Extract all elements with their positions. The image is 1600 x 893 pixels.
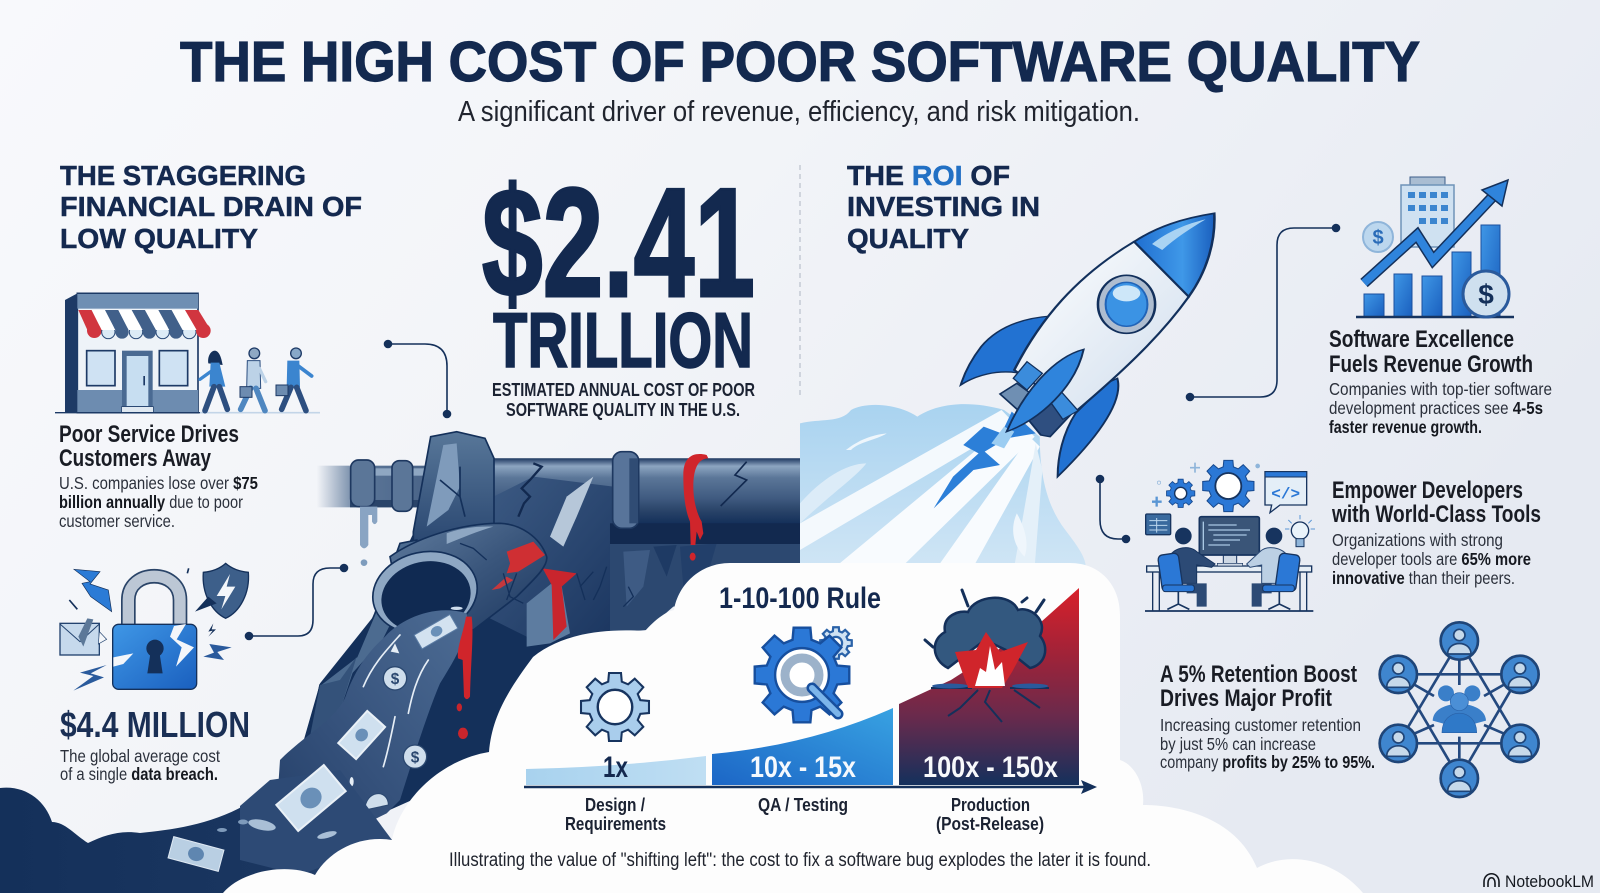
icon: storefront with customers walking away: [55, 293, 320, 413]
coin: [383, 667, 407, 690]
text block: revenue growth: development practices see 4-5s: [1329, 398, 1543, 418]
connector: rocket to revenue: [1186, 224, 1340, 400]
rock backing mass: [267, 458, 800, 850]
text block: retention: Drives Major Profit: [1160, 685, 1332, 712]
icon: production explosion: [925, 590, 1049, 722]
rocket nose: [1134, 213, 1214, 297]
thin pipe on left: [317, 466, 427, 507]
heading: ROI: THE ROI OF: [847, 160, 1010, 191]
panel: white cloud: [223, 563, 1363, 893]
red rust crack: [543, 568, 577, 640]
red leak from mouth: [458, 617, 472, 699]
stage labels: QA / Testing: [758, 795, 848, 815]
multiplier labels: 1x: [603, 751, 628, 784]
stage labels: Design /: [585, 795, 645, 815]
caption: Illustrating the value of "shifting left": the cost to fix a software bug explodes the later it is found.: [449, 850, 1151, 871]
stage labels: [565, 795, 1044, 834]
text block: data breach: The global average cost: [60, 746, 220, 766]
coin: $: [391, 671, 400, 688]
coin small: [1363, 222, 1393, 252]
icon: developers at desk: [1145, 460, 1315, 611]
connector: padlock to pipe: [246, 564, 348, 640]
text block: poor service: [59, 421, 258, 531]
chart: cost escalation curve: [524, 588, 1097, 794]
connector: rocket to developers: [1096, 476, 1130, 542]
stage labels: (Post-Release): [936, 814, 1044, 834]
text block: poor service: customer service.: [59, 511, 175, 531]
small gear: [1167, 479, 1195, 507]
code panel: [1146, 514, 1171, 535]
rocket flame: [934, 412, 1036, 508]
headline statistic: 2.41 trillion: [482, 156, 755, 420]
multiplier labels: 100x - 150x: [923, 751, 1058, 784]
nodes: [1380, 622, 1539, 797]
text block: poor service: Customers Away: [59, 445, 212, 472]
text block: revenue growth: Fuels Revenue Growth: [1329, 351, 1533, 378]
illustration: rocket: [934, 213, 1214, 508]
headline statistic: 2.41 trillion: $2.41: [482, 156, 755, 329]
heading: financial drain: LOW QUALITY: [60, 223, 258, 254]
text block: retention: [1160, 661, 1375, 772]
banknote: [338, 711, 385, 759]
coin: $: [411, 749, 420, 766]
illustration: exhaust cloud behind rocket: [800, 404, 1086, 567]
growth arrow: [1364, 180, 1508, 283]
text block: developer tools: Empower Developers: [1332, 477, 1523, 504]
money stream: [273, 610, 467, 860]
title: THE HIGH COST OF POOR SOFTWARE QUALITY: [180, 30, 1420, 94]
coin: [403, 745, 427, 768]
text block: retention: company profits by 25% to 95%.: [1160, 752, 1375, 772]
banknote in pool: [168, 837, 224, 871]
red patch on broken pipe: [507, 542, 545, 573]
stream highlights: [363, 635, 428, 767]
icon: broken padlock with lightning: [60, 563, 249, 691]
connector: storefront to pipe: [384, 340, 450, 418]
text block: poor service: billion annually due to poor: [59, 492, 243, 512]
broken pipe section: [390, 523, 547, 630]
text block: revenue growth: faster revenue growth.: [1329, 417, 1482, 437]
text block: revenue growth: Software Excellence: [1329, 326, 1514, 353]
code window: </>: [1271, 486, 1300, 504]
centre group: [1433, 685, 1486, 733]
coin small: $: [1372, 227, 1384, 249]
banknote: [414, 614, 458, 649]
stage labels: Production: [951, 795, 1030, 815]
text block: revenue growth: Companies with top-tier software: [1329, 379, 1552, 399]
icon: QA gear with wrench: [755, 627, 852, 722]
pipe collars: [613, 452, 639, 528]
icon: customer network: [1380, 622, 1539, 797]
text block: retention: Increasing customer retention: [1160, 715, 1361, 735]
heading: financial drain: THE STAGGERING: [60, 160, 306, 191]
heading: ROI: INVESTING IN: [847, 191, 1040, 222]
heading: ROI: QUALITY: [847, 223, 969, 254]
text block: developer tools: Organizations with strong: [1332, 530, 1503, 550]
coin large: $: [1478, 279, 1494, 310]
banknote in pool: [276, 765, 346, 831]
headline statistic: 2.41 trillion: ESTIMATED ANNUAL COST OF POOR: [492, 380, 755, 400]
coin large: [1463, 271, 1509, 317]
left rock beside stream: [307, 540, 417, 753]
multiplier labels: 10x - 15x: [750, 751, 856, 784]
stage labels: Requirements: [565, 814, 666, 834]
text block: data breach: [60, 704, 250, 784]
rock beneath pipe: [480, 477, 613, 640]
text block: retention: by just 5% can increase: [1160, 734, 1316, 754]
text block: developer tools: innovative than their peers.: [1332, 568, 1515, 588]
heading: financial drain: FINANCIAL DRAIN OF: [60, 191, 362, 222]
large rock at joint: [413, 432, 494, 547]
illustration: cracked pipeline leaking money: [267, 432, 800, 860]
rocket porthole: [1098, 275, 1155, 333]
segment: design: [526, 756, 706, 785]
text block: data breach: of a single data breach.: [60, 764, 218, 784]
rocket collar: [1013, 362, 1078, 419]
text block: revenue growth: [1329, 326, 1552, 437]
rocket left fin: [961, 316, 1051, 385]
icon: revenue growth chart: [1356, 177, 1514, 317]
cracks on main pipe: [518, 463, 542, 517]
text block: developer tools: developer tools are 65% more: [1332, 549, 1531, 569]
headline statistic: 2.41 trillion: SOFTWARE QUALITY IN THE U.S.: [506, 400, 740, 420]
text block: poor service: Poor Service Drives: [59, 421, 239, 448]
coin half submerged: [365, 794, 388, 810]
multiplier labels: [603, 751, 1058, 784]
red pipe band: [683, 454, 708, 545]
subtitle: A significant driver of revenue, efficiency, and risk mitigation.: [458, 96, 1140, 128]
building: [1401, 177, 1454, 247]
code window: [1265, 472, 1307, 513]
large gear: [1203, 460, 1254, 512]
text block: developer tools: with World-Class Tools: [1331, 501, 1541, 528]
heading: ROI: [847, 160, 1040, 254]
rocket right fin: [1058, 378, 1118, 477]
broken pipe mouth: [365, 542, 485, 643]
axis arrow: [524, 780, 1097, 794]
main pipe on right: [493, 458, 800, 523]
rocket centre fin: [1007, 349, 1084, 432]
rule chart heading: 1-10-100 Rule: [719, 582, 881, 615]
segment: QA: [712, 708, 893, 785]
light bulb: [1285, 515, 1315, 547]
rocket nozzle: [1000, 383, 1070, 437]
logo: NotebookLM: NotebookLM: [1505, 872, 1594, 891]
drip: [360, 507, 377, 548]
rocket body: [1014, 242, 1189, 412]
icon: design gear: [581, 673, 649, 741]
illustration: dark pool bottom left: [0, 765, 392, 893]
text block: developer tools: [1331, 477, 1541, 588]
text block: poor service: U.S. companies lose over $75: [59, 473, 258, 493]
text block: retention: A 5% Retention Boost: [1160, 661, 1357, 688]
segment: production: [899, 588, 1079, 785]
text block: data breach: $4.4 MILLION: [60, 704, 250, 745]
bars: [1364, 225, 1500, 317]
banknote: [287, 774, 336, 823]
headline statistic: 2.41 trillion: TRILLION: [493, 296, 753, 384]
heading: financial drain: [60, 160, 362, 254]
